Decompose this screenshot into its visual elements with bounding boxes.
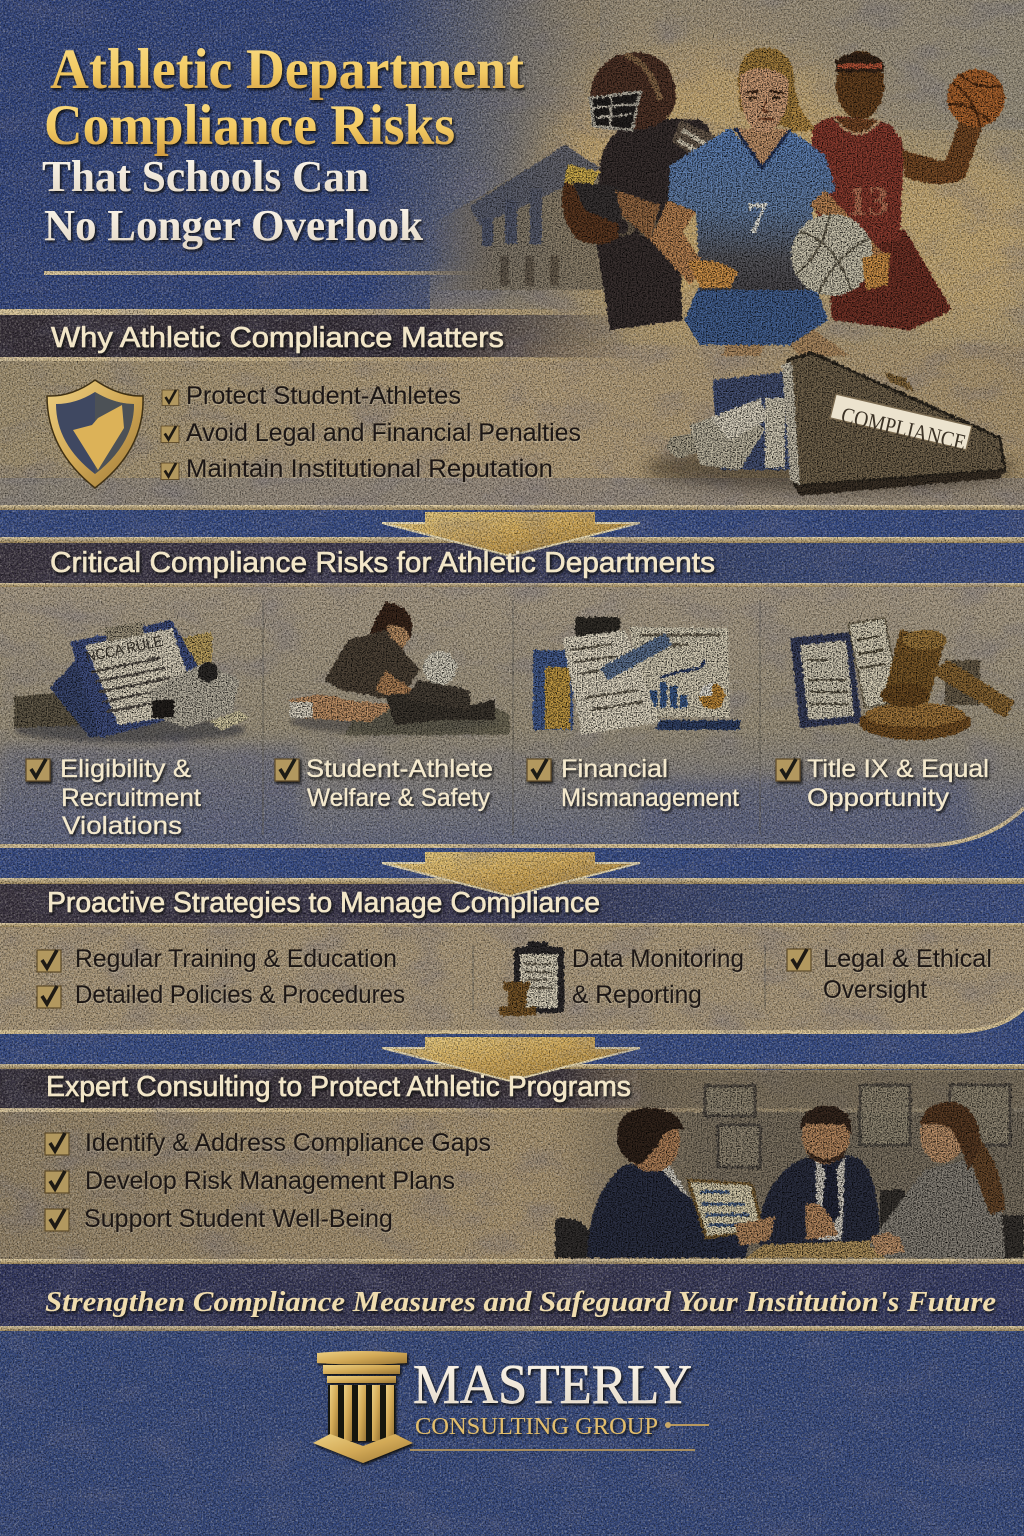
list: why compliance (161, 382, 581, 483)
risk: welfare: Student-Athlete (306, 755, 493, 783)
risk: welfare (275, 755, 493, 812)
arrow: risks to strategies (382, 852, 640, 896)
title: Athletic Department (50, 38, 524, 101)
icon: financial documents (533, 617, 740, 735)
consultant centre (758, 1106, 880, 1245)
hero illustration: athletes (430, 48, 1005, 356)
list: why compliance: Avoid Legal and Financial Penalties (186, 419, 581, 447)
label: NCCA rule sheet: NCCA RULE (84, 633, 164, 666)
title (42, 38, 524, 250)
text: data monitoring (572, 945, 744, 1009)
text: legal oversight (787, 945, 992, 1004)
text: data monitoring: Data Monitoring (572, 945, 744, 973)
table (745, 1240, 910, 1258)
section heading: critical risks: Critical Compliance Risks for Athletic Departments (50, 547, 715, 579)
icon: clipboard and gavel (499, 942, 564, 1016)
section heading: proactive strategies: Proactive Strategies to Manage Compliance (47, 887, 600, 919)
risk: eligibility: Eligibility & (60, 755, 191, 783)
wordmark: MASTERLY (413, 1354, 692, 1416)
text: legal oversight: Legal & Ethical (823, 945, 992, 973)
band: why compliance (0, 315, 1024, 358)
list: strategies: Regular Training & Education (75, 945, 397, 973)
band: risks (0, 505, 1024, 510)
arrow: strategies to consulting (382, 1037, 640, 1081)
band structure (0, 271, 1024, 1331)
list: consulting: Identify & Address Compliance Gaps (85, 1129, 491, 1157)
list: strategies: Detailed Policies & Procedures (75, 981, 405, 1009)
risk: title ix: Title IX & Equal (807, 755, 989, 783)
text: legal oversight: Oversight (823, 976, 927, 1004)
band: call to action (0, 1259, 1024, 1264)
icon: athletic trainer helping athlete (290, 602, 510, 735)
woman center (650, 48, 890, 356)
logo: masterly (313, 1351, 709, 1463)
text: data monitoring: & Reporting (572, 981, 702, 1009)
risk: eligibility: Violations (62, 812, 182, 840)
compliance binder illustration (645, 353, 1015, 496)
compliance label: COMPLIANCE (839, 403, 968, 455)
panel: risks body (0, 585, 1024, 845)
icons row: risks (14, 602, 1015, 742)
woman center: 7 (746, 193, 768, 242)
risk: financial (527, 755, 739, 812)
compliance label (830, 394, 972, 455)
title: That Schools Can (42, 152, 369, 201)
panel dividers (263, 600, 765, 1012)
section heading: why compliance: Why Athletic Compliance Matters (51, 322, 504, 354)
icon: title IX gavel (790, 618, 1015, 740)
risk: title ix: Opportunity (807, 784, 950, 812)
list: consulting: Develop Risk Management Plans (85, 1167, 455, 1195)
band: strategies (0, 848, 1024, 882)
icon: column (313, 1351, 413, 1463)
basketball player (812, 51, 1005, 330)
meeting illustration (555, 1072, 1024, 1258)
risk: eligibility (26, 755, 201, 840)
title: Compliance Risks (44, 94, 455, 157)
risk: title ix (776, 755, 989, 812)
arrow: why to risks (382, 512, 640, 556)
list: consulting: Support Student Well-Being (84, 1205, 393, 1233)
panel: strategies body (0, 926, 1024, 1031)
section heading: expert consulting: Expert Consulting to Protect Athletic Programs (46, 1071, 631, 1103)
title: No Longer Overlook (44, 201, 424, 250)
logo: masterly: CONSULTING GROUP (415, 1414, 658, 1440)
band: consulting (950, 1010, 1024, 1033)
panel: consulting body (0, 1070, 1024, 1262)
title rule (44, 271, 489, 275)
list: strategies (37, 945, 405, 1009)
consultant left (587, 1108, 775, 1258)
risk: welfare: Welfare & Safety (307, 784, 490, 812)
consultant right (870, 1102, 1005, 1258)
risk: financial: Mismanagement (561, 784, 739, 812)
building (430, 145, 610, 290)
list: why compliance: Protect Student-Athletes (186, 382, 461, 410)
basketball player: 13 (847, 179, 889, 225)
panel: why compliance body (0, 345, 1024, 508)
football player: 33 (612, 190, 662, 246)
call to action: Strengthen Compliance Measures and Safeguard Your Institution's Future (45, 1286, 996, 1318)
risk: financial: Financial (561, 755, 668, 783)
list: why compliance: Maintain Institutional Reputation (186, 455, 553, 483)
icon: NCAA rules clipboard (14, 620, 250, 742)
football player (562, 52, 715, 330)
list: consulting (45, 1129, 491, 1233)
risk: eligibility: Recruitment (61, 784, 201, 812)
icon: shield (47, 380, 143, 488)
